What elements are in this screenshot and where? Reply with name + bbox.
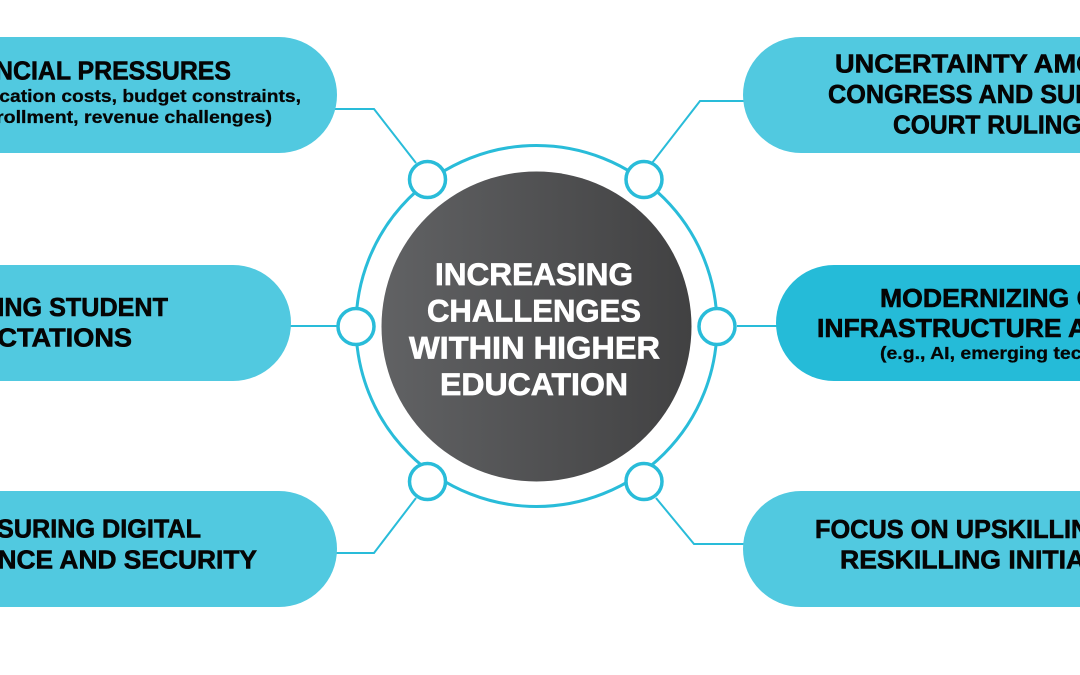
title: INCREASING [435, 256, 633, 292]
title [409, 256, 660, 402]
panel: modernizing infrastructure [776, 265, 1080, 381]
panel: upskilling and reskilling [743, 491, 1080, 607]
panel: financial pressures [0, 37, 337, 153]
panel: uncertainty among congress [743, 37, 1080, 153]
connector lines [289, 101, 778, 553]
outer ring [356, 146, 717, 506]
panel: ensuring digital resilience [0, 491, 337, 607]
panel: changing student expectations [0, 265, 291, 381]
ring nodes [338, 162, 735, 500]
center circle [382, 172, 692, 482]
title: CHALLENGES [427, 292, 641, 328]
title: EDUCATION [440, 366, 628, 402]
title: WITHIN HIGHER [409, 330, 660, 366]
